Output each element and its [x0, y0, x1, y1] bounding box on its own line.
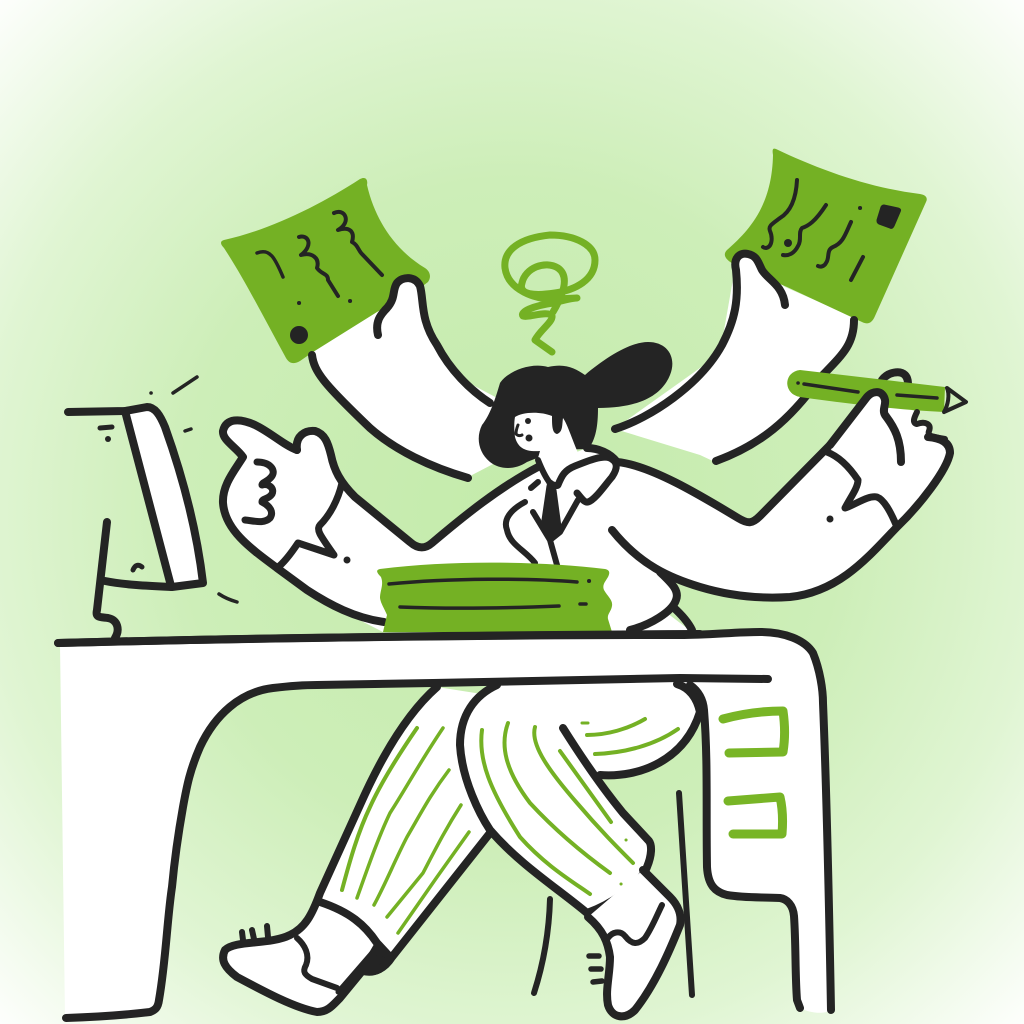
- front leg: [460, 684, 700, 913]
- scribble above head: [505, 235, 595, 352]
- right paper scribbles: [763, 180, 863, 280]
- paper left: [221, 178, 430, 363]
- desk: [58, 632, 831, 1018]
- pencil: [787, 370, 966, 412]
- stack of green books: [377, 563, 612, 632]
- monitor: [68, 377, 237, 638]
- hair: [479, 342, 672, 468]
- upper right arm outlines and hand: [615, 254, 854, 461]
- right cuff: [826, 452, 897, 527]
- chair legs: [534, 793, 692, 995]
- desk underside line: [433, 678, 768, 683]
- paper right square: [877, 205, 901, 228]
- paper left dot: [290, 326, 308, 344]
- upper left arm: [313, 285, 520, 478]
- paper right: [725, 149, 927, 323]
- left hand knuckles: [245, 462, 273, 522]
- body: hands, arms and torso: [223, 392, 950, 632]
- body side lines: [630, 572, 677, 630]
- front leg stripes: [481, 719, 678, 894]
- collar: [540, 457, 616, 515]
- paper right blob: [784, 239, 792, 247]
- left hand and arm outline: [297, 431, 538, 547]
- right shoulder and arm outline: [617, 445, 830, 522]
- head and neck: [514, 413, 582, 488]
- upper right arm: [615, 255, 853, 462]
- drawer handles: [723, 711, 784, 834]
- back finger behind pencil: [882, 372, 908, 386]
- desk top line over body: [58, 634, 700, 643]
- front finger over pencil: [830, 392, 945, 500]
- right shoe: [588, 870, 681, 1016]
- left cuff: [277, 483, 342, 568]
- back leg stripes: [342, 728, 469, 933]
- upper left arm outlines and hand: [312, 278, 490, 478]
- back leg: [223, 687, 520, 1012]
- left paper scribbles: [257, 212, 382, 303]
- back leg cuff: [320, 902, 390, 957]
- back shoe seam: [297, 938, 337, 988]
- tie and shirt front: [506, 486, 578, 565]
